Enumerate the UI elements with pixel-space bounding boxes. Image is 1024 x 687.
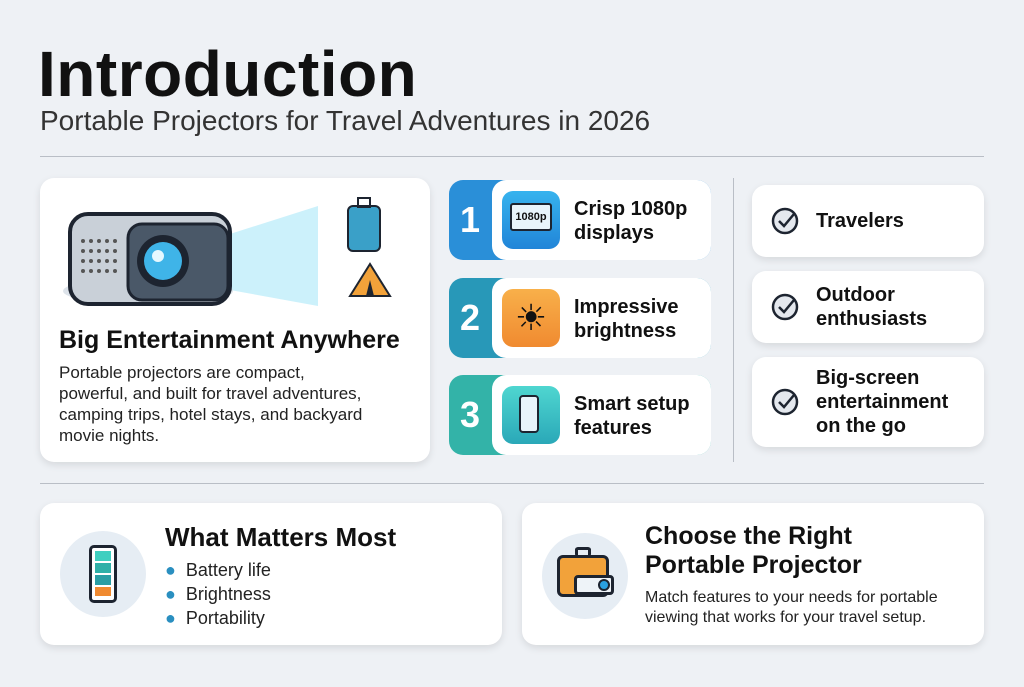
icon: projector: [63, 197, 392, 306]
feature 3: [449, 375, 711, 455]
text block: Match features to your needs for portable: [645, 589, 938, 606]
feature 1: 1: [460, 199, 480, 240]
icon: 1080p display: 1080p: [515, 211, 547, 223]
heading: Choose the Right: [645, 522, 852, 550]
icon: 1080p display: [502, 191, 560, 249]
audience: travelers: Travelers: [816, 210, 904, 232]
text block: viewing that works for your travel setup.: [645, 609, 926, 626]
audience: outdoor: Outdoor: [816, 284, 895, 306]
feature 2: 2: [460, 297, 480, 338]
feature 3: Smart setup: [574, 393, 690, 415]
feature 3: features: [574, 417, 652, 439]
heading: Big Entertainment Anywhere: [59, 326, 400, 354]
list: ● Battery life: [165, 560, 271, 580]
feature 1: [449, 180, 711, 260]
text block: Portable projectors are compact,: [59, 363, 305, 382]
audience: big-screen: on the go: [816, 415, 906, 437]
panel: choose the right: [522, 503, 984, 645]
heading: [645, 522, 862, 579]
audience: outdoor: [752, 271, 984, 343]
panel: what matters most: [40, 503, 502, 645]
feature 2: [449, 278, 711, 358]
audience: travelers: [752, 185, 984, 257]
icon: suitcase projector: [542, 533, 628, 619]
title: Introduction: [38, 38, 417, 110]
list: ● Brightness: [165, 584, 271, 604]
icon: brightness: [502, 289, 560, 347]
panel: big entertainment: [40, 178, 430, 462]
feature 1: Crisp 1080p: [574, 198, 687, 220]
audience: big-screen: Big-screen: [816, 367, 919, 389]
text block: movie nights.: [59, 426, 159, 445]
icon: brightness: ☀: [515, 297, 547, 338]
icon: smartphone wifi: [502, 386, 560, 444]
text block: [59, 363, 362, 445]
audience: big-screen: [752, 357, 984, 447]
feature 1: displays: [574, 222, 654, 244]
feature 2: brightness: [574, 320, 676, 342]
heading: Portable Projector: [645, 551, 862, 579]
list: ● Portability: [165, 608, 265, 628]
list: [165, 560, 271, 628]
subtitle: Portable Projectors for Travel Adventures in 2026: [40, 105, 650, 136]
feature 2: Impressive: [574, 296, 679, 318]
text block: powerful, and built for travel adventures,: [59, 384, 361, 403]
text block: camping trips, hotel stays, and backyard: [59, 405, 362, 424]
audience: big-screen: entertainment: [816, 391, 948, 413]
icon: battery: [60, 531, 146, 617]
audience: outdoor: enthusiasts: [816, 308, 927, 330]
text block: [645, 589, 938, 626]
feature 3: 3: [460, 394, 480, 435]
heading: What Matters Most: [165, 522, 396, 552]
